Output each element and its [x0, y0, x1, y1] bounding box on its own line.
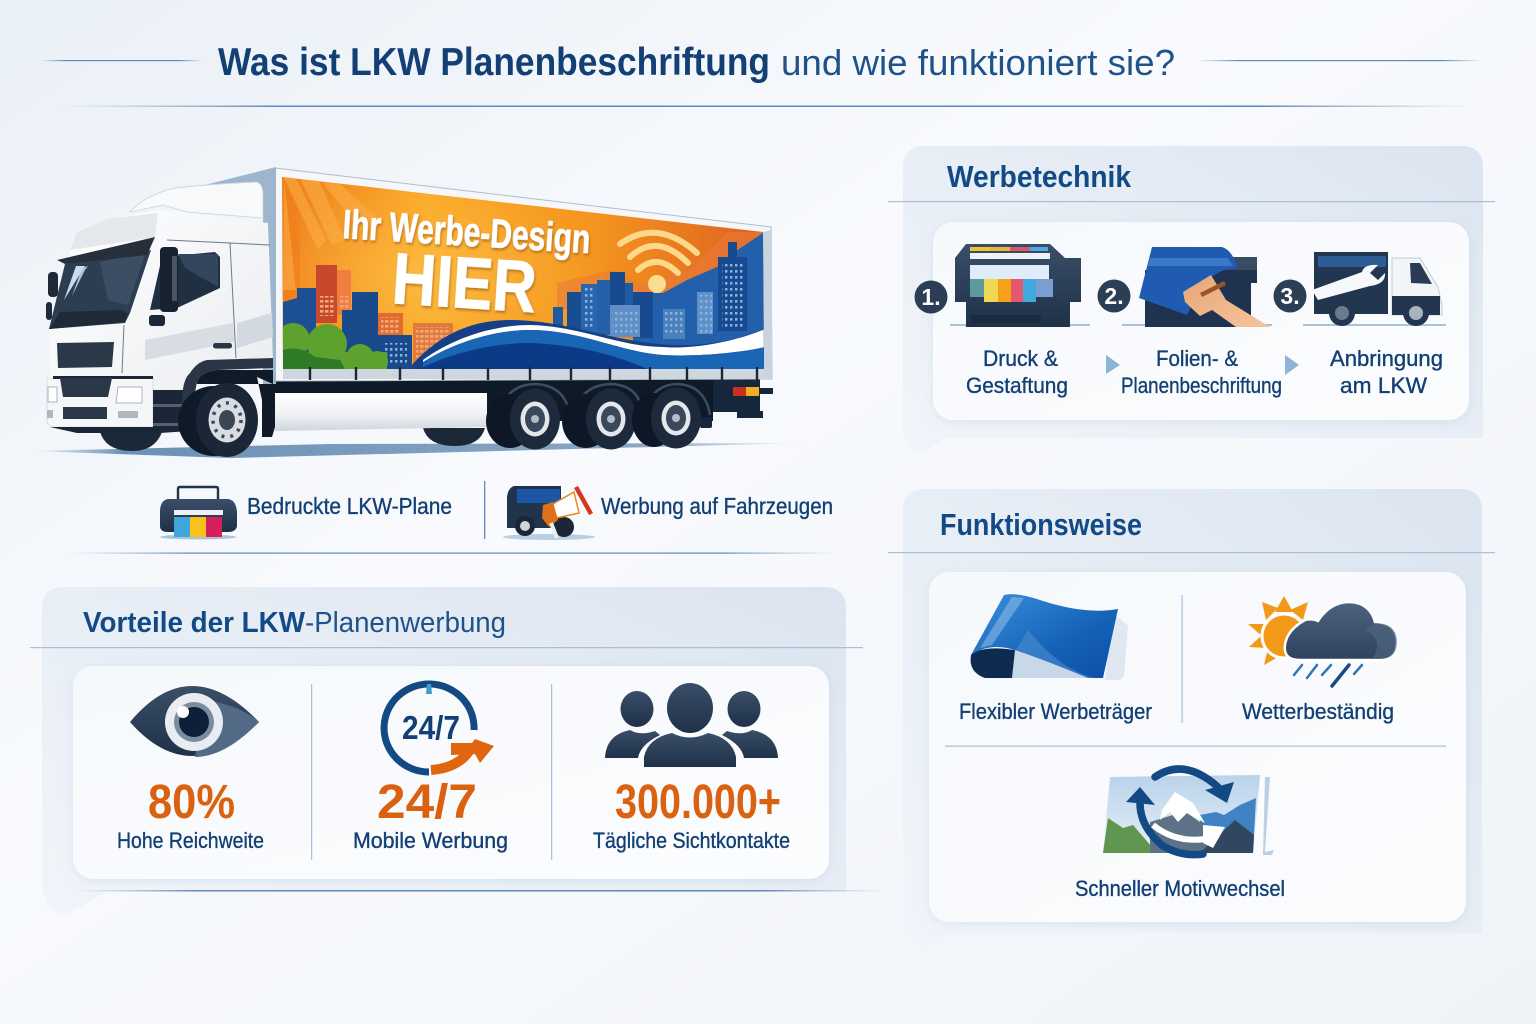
step 1 badge: [914, 280, 948, 314]
step 3 badge: 3.: [1280, 283, 1300, 309]
stat: 24/7: Mobile Werbung: [353, 828, 508, 853]
text: printed tarp: Bedruckte LKW-Plane: [247, 493, 452, 519]
left skyline: [337, 270, 351, 315]
heading: Funktionsweise: [940, 507, 1142, 542]
text: step 3: am LKW: [1340, 373, 1427, 398]
printed banner: HIER: [390, 239, 539, 328]
arrow: [1285, 355, 1299, 375]
icon: 24/7 clock with arrow: [384, 684, 494, 772]
icon: foil application: [1122, 247, 1272, 327]
panel: Funktionsweise: [888, 489, 1495, 946]
icon: printed tarp printer: [160, 487, 237, 540]
windshield: [49, 250, 151, 329]
grey side bands: [145, 323, 234, 360]
stat: 80 percent: [117, 776, 264, 853]
tarp rail and hooks: [283, 367, 764, 380]
text: motif change: Schneller Motivwechsel: [1075, 876, 1285, 901]
stat: 300.000+: 300.000+: [615, 776, 781, 829]
ground shadow: [30, 443, 805, 458]
front wheel: [178, 383, 258, 457]
text: step 3: [1330, 346, 1443, 398]
icon: 24/7 clock with arrow: 24/7: [402, 709, 460, 746]
title: Was ist LKW Planenbeschriftung: [218, 41, 770, 84]
title: und wie funktioniert sie?: [781, 42, 1175, 83]
heading: -Planenwerbung: [305, 607, 506, 639]
banner text: Ihr Werbe-Design: [341, 201, 592, 262]
stat: 24/7: 24/7: [377, 776, 477, 829]
stat: 300.000+: [593, 776, 790, 853]
bushes: [282, 323, 388, 369]
text: step 1: Gestaftung: [966, 373, 1068, 398]
air deflector: [193, 167, 276, 384]
card: features: [929, 572, 1466, 922]
icon: quick motif change: [1103, 769, 1274, 855]
rear wheels: [486, 384, 710, 450]
step 1 badge: 1.: [921, 284, 941, 310]
icon: flexible banner: [971, 594, 1128, 680]
wave: [412, 320, 765, 370]
text: vehicle advertising: Werbung auf Fahrzeugen: [601, 493, 833, 519]
stat: 24/7: [353, 776, 508, 853]
chassis: [270, 378, 715, 394]
step 2 badge: 2.: [1104, 283, 1124, 309]
icon: vehicle with megaphone: [503, 486, 595, 540]
hidden wheels: [100, 428, 485, 451]
step 3 badge: [1274, 280, 1306, 312]
heading: Werbetechnik: [947, 159, 1132, 194]
grille and bumper: [57, 342, 114, 368]
card: process steps: [914, 222, 1469, 420]
text: step 2: Planenbeschriftung: [1121, 373, 1282, 398]
step 2 badge: [1098, 280, 1130, 312]
icon: large-format printer: [950, 244, 1090, 327]
side window and mirror: [150, 252, 220, 310]
cargo box frame: [275, 168, 772, 381]
stat: 300.000+: Tägliche Sichtkontakte: [593, 828, 790, 853]
panel: Werbetechnik: [888, 146, 1495, 453]
text: step 2: [1121, 346, 1282, 398]
text: step 3: Anbringung: [1330, 346, 1443, 371]
text: step 2: Folien- &: [1156, 346, 1238, 371]
icon: truck with wrench: [1303, 252, 1446, 326]
stat: 80 percent: Hohe Reichweite: [117, 828, 264, 853]
card: statistics: [73, 666, 829, 879]
title: [40, 41, 1485, 107]
stat: 80 percent: 80%: [148, 776, 235, 829]
icon: people: [605, 683, 778, 767]
right skyline: [553, 307, 563, 327]
arrow: [1106, 355, 1120, 374]
printed banner: [276, 175, 770, 373]
text: weatherproof: Wetterbeständig: [1242, 699, 1394, 724]
feature row under truck: [70, 481, 840, 554]
wifi symbol: [620, 233, 697, 293]
heading: Vorteile der LKW: [83, 607, 306, 639]
text: step 1: [966, 346, 1068, 398]
cab body: [47, 210, 273, 431]
text: flexible: Flexibler Werbeträger: [959, 699, 1152, 724]
wheel arch: [182, 358, 273, 403]
truck illustration: [30, 167, 805, 458]
panel: Vorteile der LKW-Planenwerbung: [30, 587, 885, 914]
side skirt: [275, 393, 487, 431]
text: step 1: Druck &: [983, 346, 1058, 371]
icon: sun and rain cloud: [1248, 596, 1397, 686]
icon: eye: [130, 686, 259, 757]
